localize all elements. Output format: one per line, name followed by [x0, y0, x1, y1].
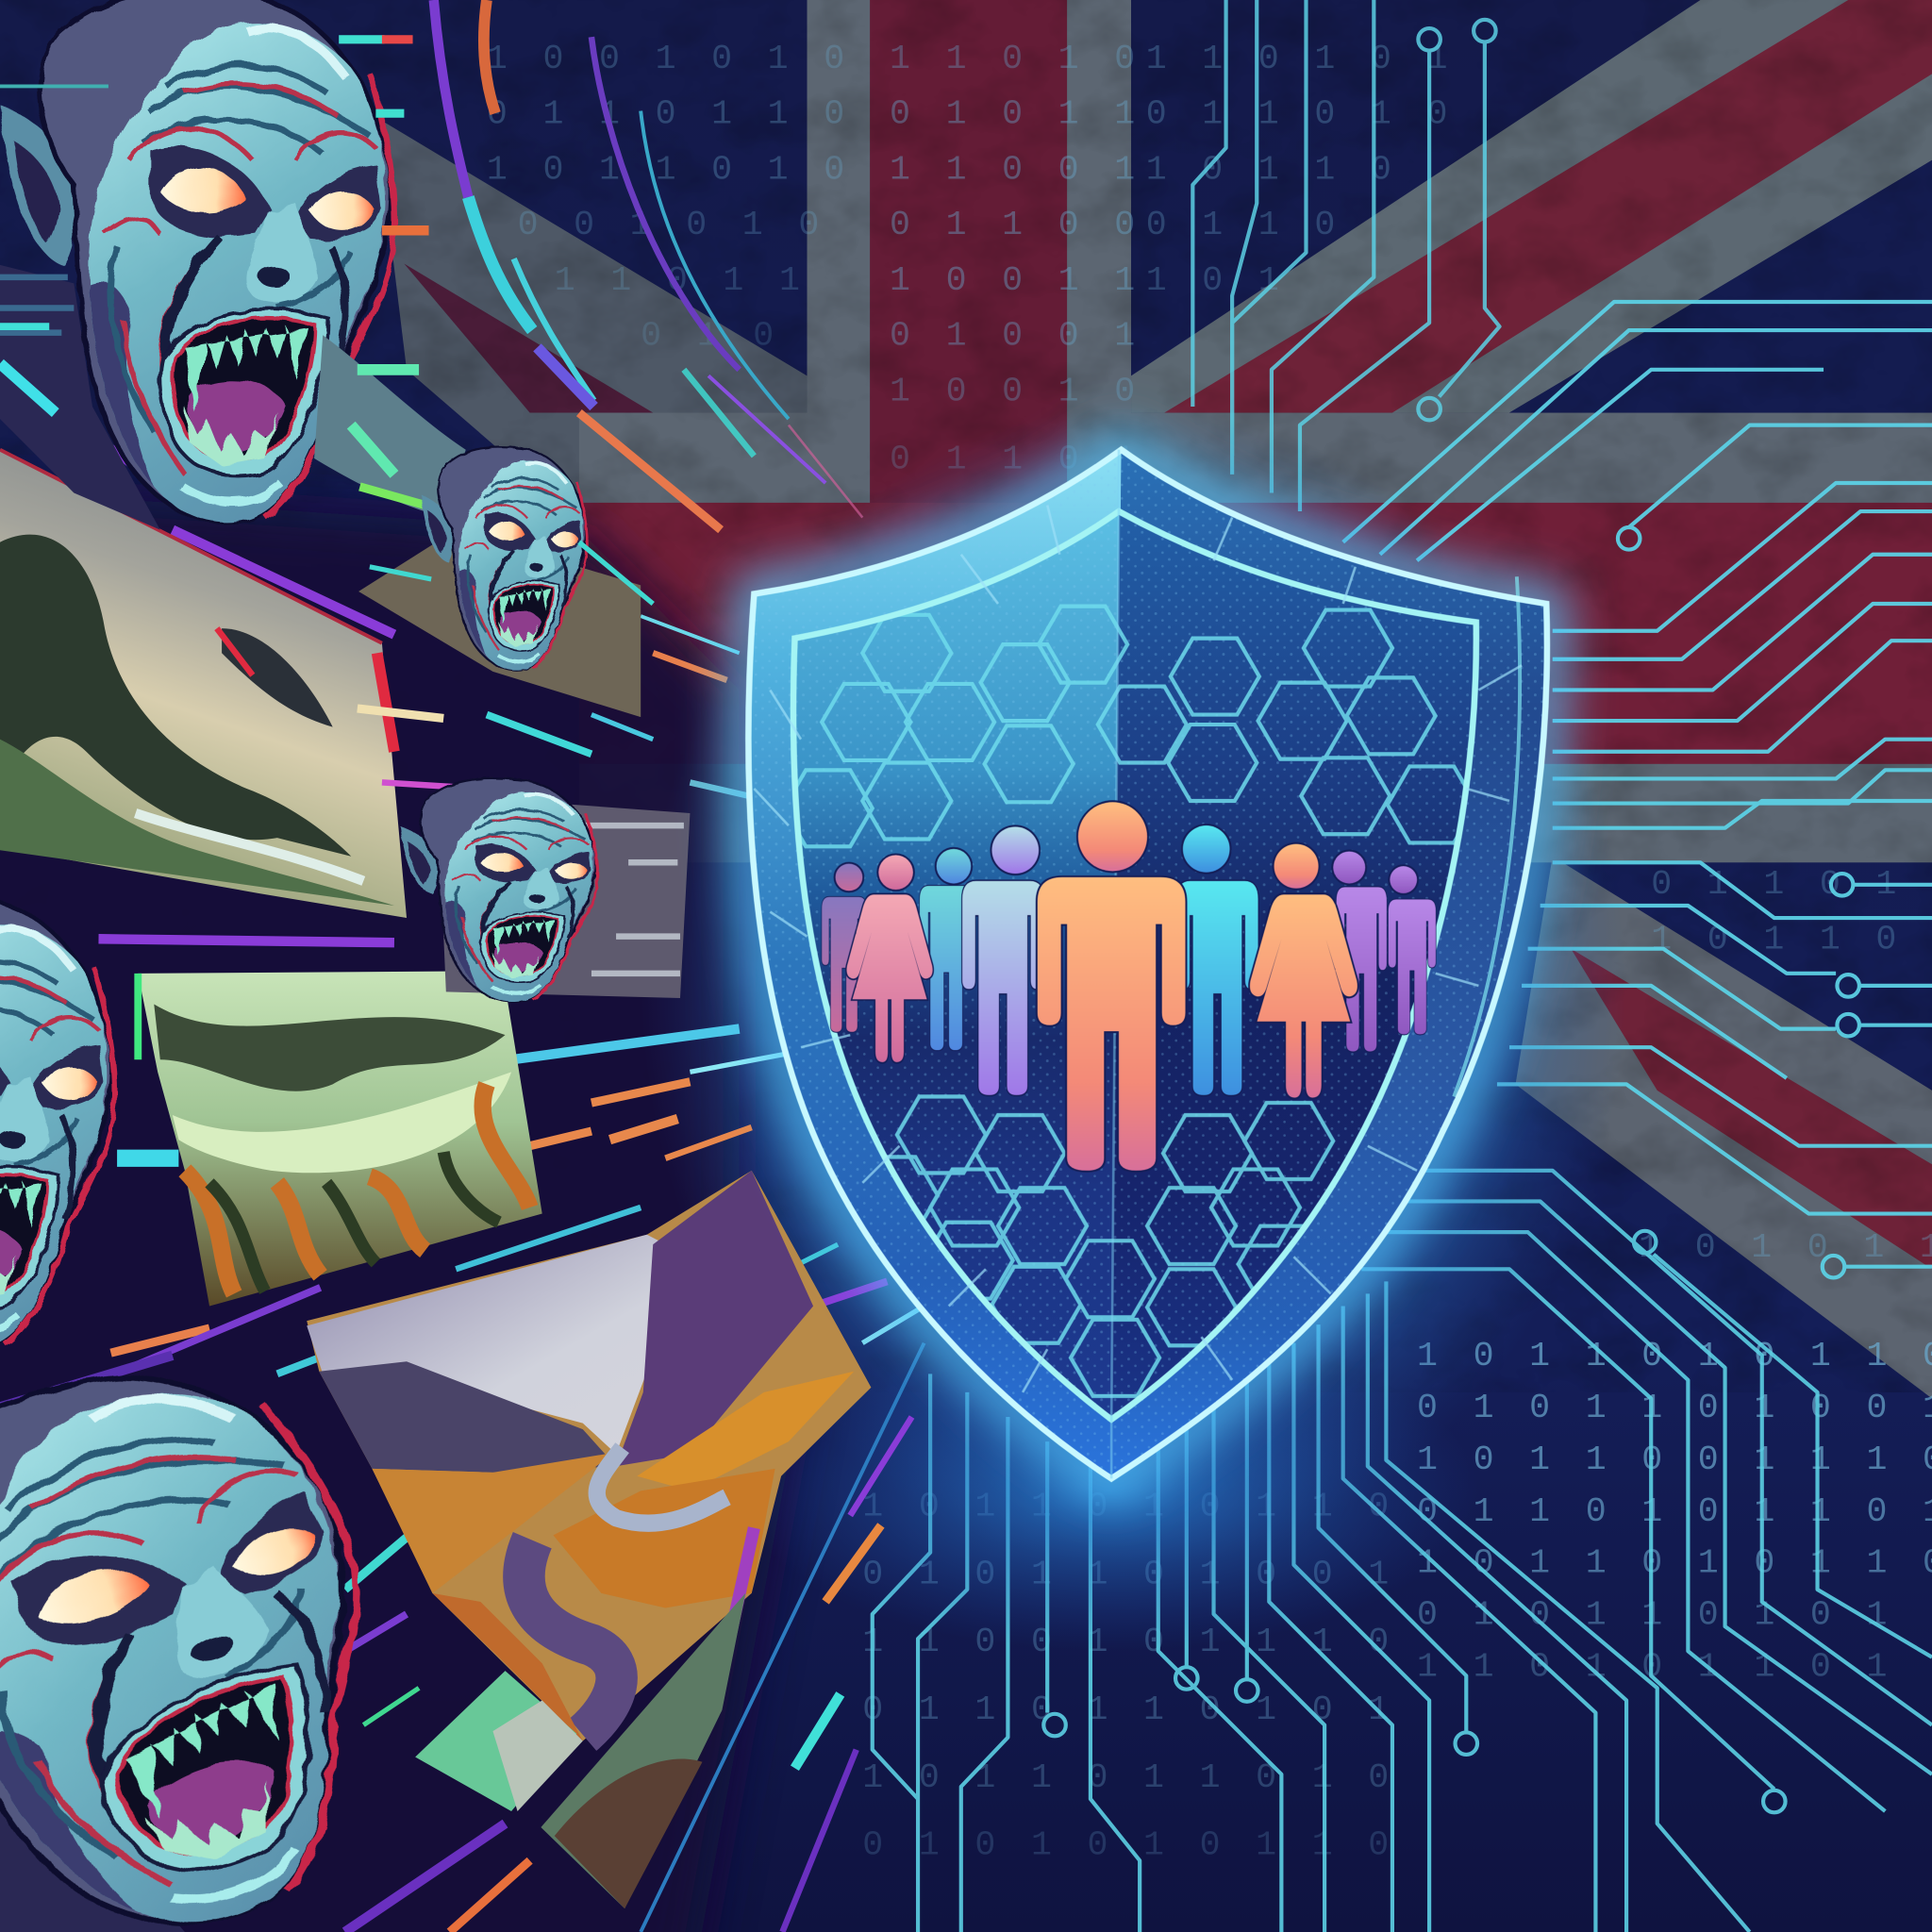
shield glow — [641, 407, 1626, 1651]
shield dot texture — [748, 450, 1547, 1478]
lower right traces — [873, 1171, 1932, 1932]
binary code columns: 1 1 0 1 1 — [555, 261, 808, 300]
binary code columns: 0 1 0 1 1 0 1 0 1 — [1417, 1595, 1894, 1634]
union jack flag — [0, 0, 1932, 1398]
landscape panel: lower fragment — [415, 1593, 745, 1908]
binary code columns: 0 1 1 0 1 1 0 1 0 1 — [862, 1690, 1396, 1729]
binary code columns: 0 1 0 0 1 — [890, 317, 1142, 356]
shield rim fold — [1454, 576, 1520, 1096]
landscape panel: green swirl — [138, 971, 542, 1306]
shield outer band right — [1111, 450, 1547, 1478]
binary code columns: 1 1 0 0 1 — [890, 150, 1142, 189]
shield centre ridge — [1111, 450, 1119, 1478]
monster face: left cropped — [0, 897, 178, 1349]
binary code columns: 1 0 1 1 0 — [1146, 150, 1399, 189]
hexagon honeycomb — [784, 607, 1476, 1396]
binary code columns: 1 0 0 1 1 — [890, 261, 1142, 300]
binary code columns: 0 1 1 0 0 — [890, 206, 1142, 244]
binary code columns: 0 1 0 — [641, 317, 781, 356]
binary code columns: 1 0 0 1 0 1 0 — [487, 40, 852, 78]
binary code columns — [487, 40, 1932, 1865]
left side dark backdrop — [0, 487, 801, 1932]
person: blue man left — [962, 826, 1043, 1095]
shield outer rim — [748, 450, 1547, 1478]
binary code columns: 0 1 1 0 1 — [890, 440, 1142, 478]
landscape panel: mountain valley — [307, 1171, 871, 1741]
binary code columns: 0 1 0 1 0 1 0 1 1 0 — [862, 1826, 1396, 1865]
shield cracks — [754, 506, 1522, 1392]
monster face: top large — [0, 0, 466, 530]
people group — [822, 802, 1436, 1171]
person: far right — [1389, 866, 1436, 1034]
binary code columns: 1 0 1 1 0 1 0 1 1 0 — [862, 1488, 1396, 1526]
person: cyan man right — [1176, 825, 1258, 1095]
shield outer glow — [748, 450, 1547, 1478]
shield inner right half — [1111, 511, 1476, 1420]
speed streaks toward shield — [0, 0, 924, 1932]
binary code columns: 0 1 1 0 1 0 — [1146, 95, 1455, 134]
monster face: middle glitch panel — [382, 778, 690, 1002]
shield outer band left — [748, 450, 1122, 1478]
binary code columns: 0 0 1 0 1 0 — [518, 206, 826, 244]
binary code columns: 0 1 1 0 — [1146, 206, 1342, 244]
binary code columns: 1 1 0 1 0 — [890, 40, 1142, 78]
shield inner left half — [793, 511, 1119, 1420]
binary code columns: 1 1 0 0 1 0 1 1 1 0 — [862, 1623, 1396, 1661]
person: far left — [822, 864, 866, 1032]
binary code columns: 1 0 1 1 0 1 0 — [487, 150, 852, 189]
top traces — [1192, 0, 1500, 511]
person: sky left — [920, 849, 973, 1050]
landscape panel: tree — [0, 450, 443, 918]
monster face: bottom large — [0, 1375, 361, 1932]
circuit traces — [873, 0, 1932, 1932]
right traces — [1343, 302, 1932, 1277]
binary code columns: 1 0 1 1 0 1 1 0 1 0 — [862, 1758, 1396, 1797]
binary code columns: 1 1 0 1 0 1 — [1146, 40, 1455, 78]
person: woman right — [1250, 844, 1357, 1097]
binary code columns: 1 1 0 1 0 1 1 0 1 — [1417, 1647, 1894, 1686]
binary code columns: 0 1 0 1 1 0 1 0 0 1 — [862, 1555, 1396, 1593]
person: purple right — [1333, 852, 1387, 1051]
binary code columns: 1 0 1 — [1146, 261, 1287, 300]
binary code columns: 0 1 1 0 1 1 0 — [487, 95, 852, 134]
person: woman left — [846, 855, 933, 1062]
binary code columns: 0 1 0 1 1 — [890, 95, 1142, 134]
binary code columns: 1 0 0 1 0 — [890, 372, 1142, 410]
shield — [748, 450, 1547, 1478]
person: centre man — [1038, 802, 1185, 1171]
monster face: small in panel — [358, 447, 653, 717]
shield inner rim — [793, 511, 1476, 1420]
